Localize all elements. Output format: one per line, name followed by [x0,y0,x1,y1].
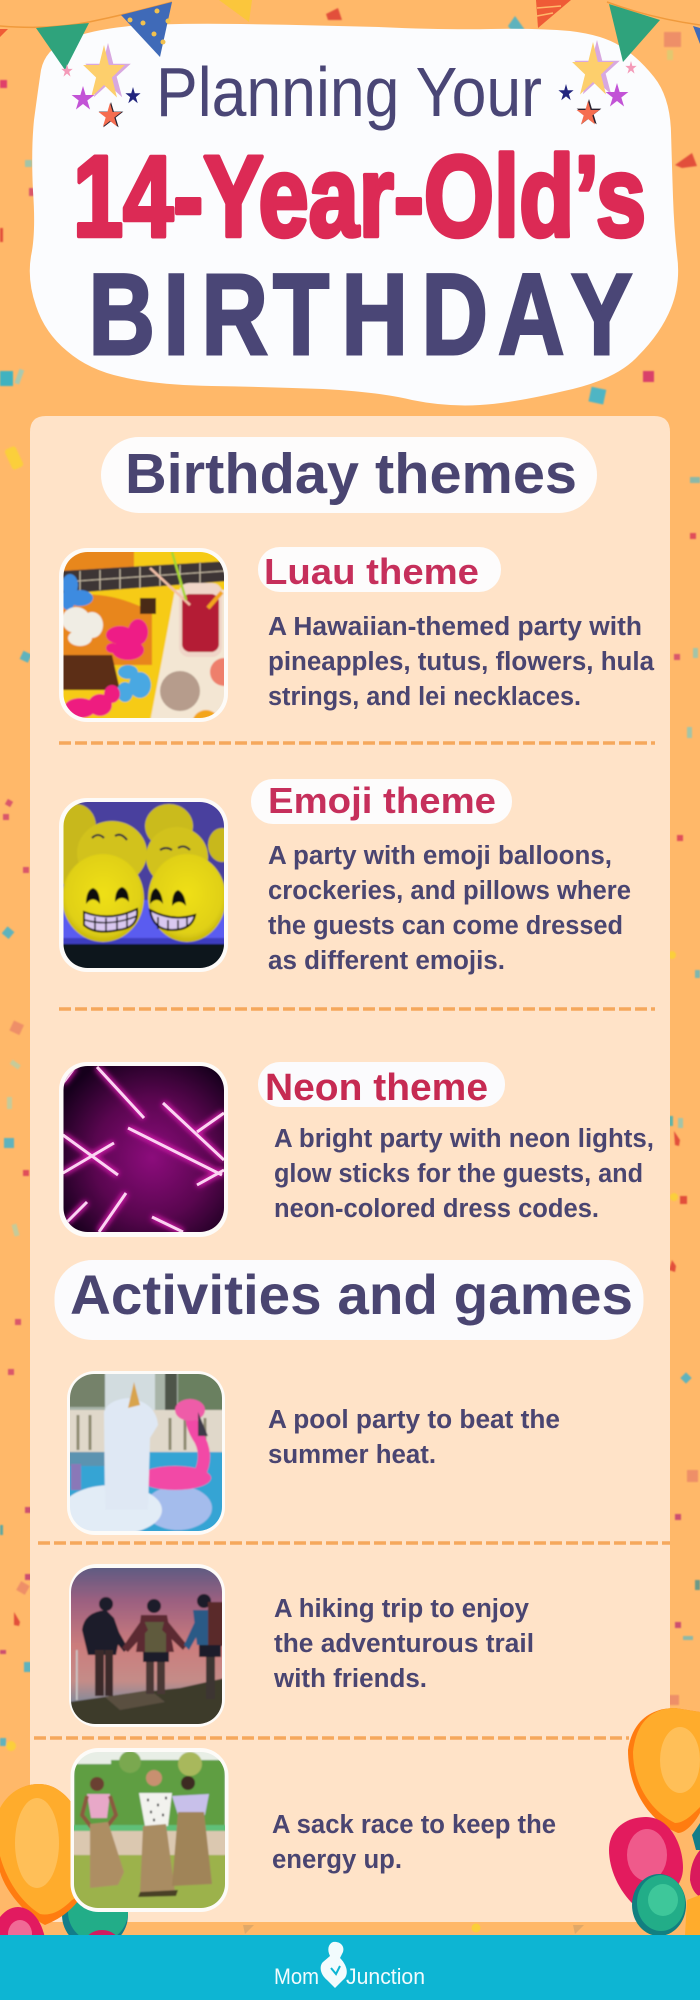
text: sack race description: A sack race to keep the [272,1811,556,1839]
balloons: left bottom group [0,1784,128,1993]
bunting: striped red flag [536,0,571,28]
text: emoji description: as different emojis. [268,947,505,975]
stars: right cluster [558,40,637,125]
text: pool description: summer heat. [268,1441,436,1469]
panel: content [30,416,670,1922]
text: pool description [268,1406,560,1469]
footer logo: MomJunction: Junction [346,1964,425,1989]
text: hiking description: A hiking trip to enjoy [274,1595,530,1623]
heading: Birthday themes: Birthday themes [125,442,577,506]
bunting: left corner scrap [0,29,8,37]
subheading: Emoji theme: Emoji theme [268,780,496,821]
subheading: Luau theme: Luau theme [264,551,479,592]
text: neon description: A bright party with neon lights, [274,1125,654,1153]
text: hiking description: the adventurous trail [274,1630,534,1658]
text: luau description: pineapples, tutus, flowers, hula [268,648,655,676]
text: hiking description: with friends. [273,1665,427,1693]
text: luau description [268,613,655,711]
bunting: green flag left [36,23,89,70]
text: luau description: strings, and lei necklaces. [268,683,581,711]
photo: pool party [62,1371,225,1535]
photo: sack race [70,1748,228,1912]
footer logo: MomJunction [274,1942,425,1989]
photo: hiking [69,1564,225,1727]
footer logo: MomJunction: Mom [274,1964,319,1989]
bunting: green flag right [609,4,660,62]
photo: luau [59,548,228,722]
title line 1: Planning Your [156,53,542,131]
title blob [30,24,678,405]
bunting: left string [0,2,172,27]
text: pool description: A pool party to beat the [268,1406,560,1434]
footer bar [0,1935,700,2000]
heading: Activities and games: Activities and games [70,1263,633,1326]
text: emoji description: A party with emoji balloons, [268,842,612,870]
photo: emoji balloons [56,798,236,972]
text: sack race description [272,1811,556,1874]
title line 3: BIRTHDAY [88,251,632,379]
text: emoji description: crockeries, and pillows where [268,877,631,905]
strip confetti [243,1924,584,1934]
text: neon description: glow sticks for the guests, and [274,1160,643,1188]
text: emoji description: the guests can come dressed [268,912,623,940]
text: sack race description: energy up. [272,1846,402,1874]
bunting: blue dotted flag [121,2,172,57]
text: neon description [274,1125,654,1223]
text: luau description: A Hawaiian-themed party with [268,613,642,641]
text: emoji description [268,842,631,975]
text: hiking description [273,1595,534,1693]
bunting: top yellow flag [219,0,252,22]
panel accent strip [30,1922,670,1935]
balloons: right bottom group [609,1708,700,1936]
subheading: Neon theme: Neon theme [265,1067,488,1109]
stars: left cluster [61,43,141,127]
text: neon description: neon-colored dress codes. [274,1195,599,1223]
bunting: right blue scrap [693,26,700,44]
bunting: right string [607,2,700,25]
photo: neon [59,1062,228,1237]
